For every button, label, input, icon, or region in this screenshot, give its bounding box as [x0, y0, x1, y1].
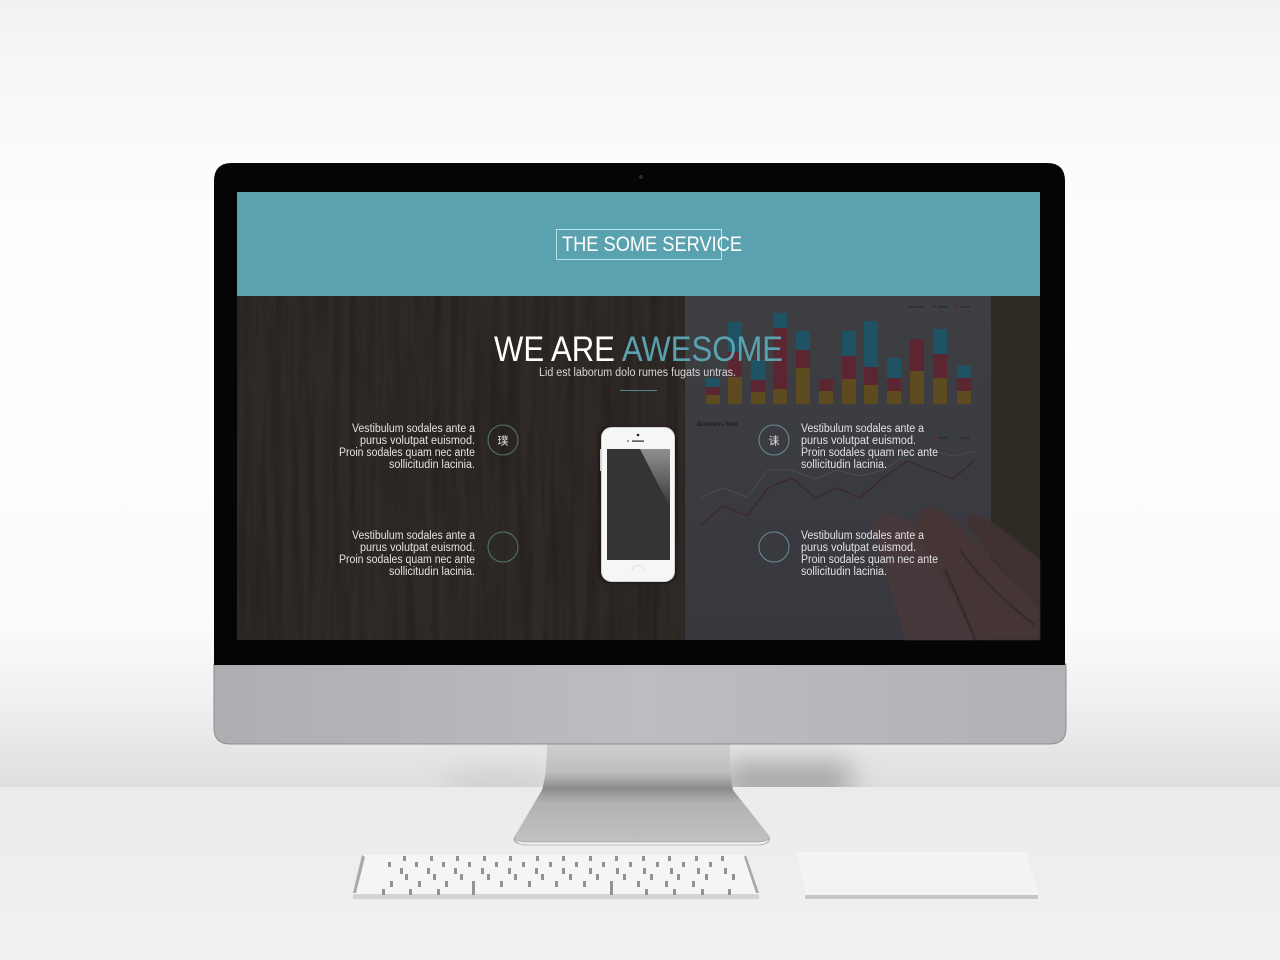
right wood background	[991, 296, 1040, 640]
header title box	[556, 230, 722, 260]
bar chart	[706, 313, 971, 404]
wall shadow behind stand	[450, 762, 850, 802]
hand	[873, 508, 1040, 640]
keyboard front edge	[353, 894, 759, 899]
header title: THE SOME SERVICE	[562, 233, 742, 256]
icon: top right circle	[759, 425, 789, 455]
camera	[639, 175, 643, 179]
text block: top left: purus volutpat euismod.	[360, 435, 475, 447]
text block: top right: purus volutpat euismod.	[801, 435, 916, 447]
wood grain	[237, 296, 685, 640]
text block: bottom left	[339, 530, 476, 578]
text block: bottom right: Proin sodales quam nec ante	[801, 554, 938, 566]
line chart	[701, 450, 975, 525]
text block: bottom right	[801, 530, 938, 578]
text block: bottom left: Proin sodales quam nec ante	[339, 554, 475, 566]
chart heading: business item: Business Item	[697, 422, 738, 428]
phone earpiece	[627, 434, 644, 442]
keyboard	[353, 855, 759, 899]
text block: top right	[801, 423, 938, 471]
text block: top left: Proin sodales quam nec ante	[339, 447, 475, 459]
phone	[598, 427, 677, 583]
text block: bottom left: sollicitudin lacinia.	[389, 566, 475, 578]
icon: bottom left circle	[488, 532, 518, 562]
text block: bottom left: purus volutpat euismod.	[360, 542, 475, 554]
monitor body	[214, 163, 1066, 744]
background: table	[0, 787, 1280, 960]
text block: top left	[339, 423, 476, 471]
key gaps	[382, 856, 735, 895]
text block: top right: sollicitudin lacinia.	[801, 459, 887, 471]
text block: top left: Vestibulum sodales ante a	[352, 423, 476, 435]
phone screen glare	[640, 449, 670, 507]
heading divider	[620, 390, 657, 391]
icon: bottom right circle	[759, 532, 789, 562]
text block: top right: Proin sodales quam nec ante	[801, 447, 938, 459]
text block: top left: sollicitudin lacinia.	[389, 459, 475, 471]
header band	[237, 192, 1040, 296]
icon: top left circle: 璞	[498, 434, 508, 448]
text block: top right: Vestibulum sodales ante a	[801, 423, 925, 435]
text block: bottom right: purus volutpat euismod.	[801, 542, 916, 554]
phone screen	[607, 449, 670, 560]
monitor aluminium edge and chin	[214, 664, 1066, 744]
keyboard body	[353, 855, 759, 899]
chart legends	[909, 305, 970, 439]
screen slide	[237, 192, 1040, 640]
main heading: WE ARE AWESOME	[494, 330, 783, 369]
subheading: Lid est laborum dolo rumes fugats untras.	[539, 367, 736, 379]
icon: top left circle	[488, 425, 518, 455]
monitor stand	[513, 744, 770, 845]
left wood background	[237, 296, 685, 640]
text block: bottom right: Vestibulum sodales ante a	[801, 530, 925, 542]
phone home button	[632, 566, 645, 570]
trackpad	[797, 852, 1038, 899]
text block: bottom right: sollicitudin lacinia.	[801, 566, 887, 578]
text block: bottom left: Vestibulum sodales ante a	[352, 530, 476, 542]
document background	[685, 296, 991, 640]
icon: top right circle: 诔	[768, 434, 780, 448]
keyboard side edges	[353, 855, 759, 893]
monitor black bezel	[214, 163, 1065, 665]
